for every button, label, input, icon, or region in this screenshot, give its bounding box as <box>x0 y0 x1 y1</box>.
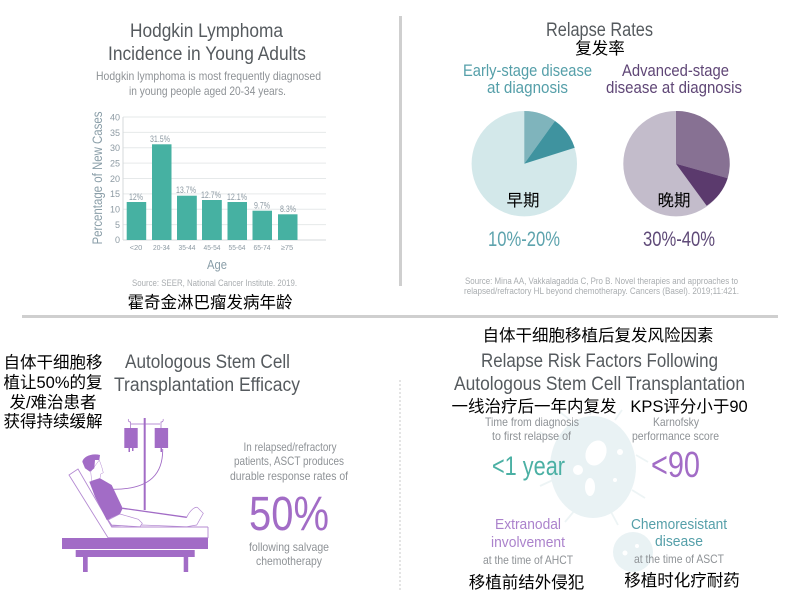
risk factor: extranodal involvement: Extranodal <box>495 516 561 533</box>
risk factor: Karnofsky score <box>630 397 748 485</box>
risk factor: extranodal involvement <box>469 516 584 592</box>
bar chart: percentage of new cases by age: 25 <box>110 158 120 168</box>
risk factor: time to relapse <box>452 397 616 481</box>
stat: 50 percent: 50% <box>249 488 329 541</box>
pie chart: early-stage relapse <box>472 111 577 216</box>
bar chart: percentage of new cases by age: 30 <box>110 143 120 153</box>
bar chart: percentage of new cases by age: 31.5% <box>150 134 170 144</box>
panel: relapse risk factors <box>452 326 748 592</box>
risk factor: chemoresistant disease <box>624 516 740 590</box>
icon: reclining mattress <box>69 469 208 538</box>
heading: relapse rates: 复发率 <box>575 39 625 58</box>
label: advanced-stage disease <box>606 61 742 97</box>
bar chart: percentage of new cases by age: 8.3% <box>280 204 296 214</box>
risk factor: chemoresistant disease: 移植时化疗耐药 <box>624 571 740 590</box>
bar chart: percentage of new cases by age: 35-44 <box>178 243 196 252</box>
bar chart: percentage of new cases by age: 65-74 <box>254 243 270 252</box>
label: early-stage disease: at diagnosis <box>487 78 568 97</box>
stat: advanced-stage rate: 30%-40% <box>643 228 715 251</box>
source: Mina et al <box>464 276 739 297</box>
bar chart: percentage of new cases by age: 15 <box>110 189 120 199</box>
text block: following salvage chemotherapy <box>249 540 329 568</box>
bar chart: percentage of new cases by age: 55-64 <box>228 243 246 252</box>
source: SEER: Source: SEER, National Cancer Institute. 2019. <box>132 278 297 289</box>
source: Mina et al: relapsed/refractory HL beyond chemotherapy. Cancers (Basel). 2019;11:421. <box>464 286 739 297</box>
bar chart: percentage of new cases by age: 10 <box>110 204 120 214</box>
heading: incidence in young adults: Hodgkin Lymphoma <box>130 21 283 42</box>
icon: large cell background <box>540 405 648 525</box>
text block: ASCT response <box>230 440 349 483</box>
label: early-stage disease <box>463 61 592 97</box>
risk factor: chemoresistant disease: Chemoresistant <box>631 516 728 533</box>
bar chart: percentage of new cases by age: 40 <box>110 112 120 122</box>
pie chart: early-stage relapse: 早期 <box>506 191 540 210</box>
heading: transplantation efficacy: Transplantation Efficacy <box>114 375 300 396</box>
text block: following salvage chemotherapy: following salvage <box>249 540 329 554</box>
bar chart: percentage of new cases by age: 20-34 <box>153 243 170 252</box>
risk factor: Karnofsky score: KPS评分小于90 <box>630 397 748 416</box>
text block: Chinese efficacy note: 发/难治患者 <box>9 393 97 412</box>
icon: small cell background <box>613 532 653 572</box>
risk factor: time to relapse: <1 year <box>492 451 565 481</box>
text block: incidence description: in young people aged 20-34 years. <box>129 84 286 98</box>
risk factor: time to relapse: 一线治疗后一年内复发 <box>452 397 616 416</box>
risk factor: extranodal involvement: involvement <box>491 534 566 551</box>
risk factor: time to relapse: to first relapse of <box>492 429 572 443</box>
bar chart: percentage of new cases by age: <20 <box>130 243 142 252</box>
text block: ASCT response: In relapsed/refractory <box>244 440 336 454</box>
caption: Chinese chart title: 霍奇金淋巴瘤发病年龄 <box>128 293 293 312</box>
risk factor: chemoresistant disease: at the time of ASCT <box>634 552 725 566</box>
heading: Chinese risk factors title: 自体干细胞移植后复发风险因素 <box>482 326 714 345</box>
panel: transplantation efficacy <box>3 352 349 572</box>
icon: patient <box>82 454 203 527</box>
bar chart: percentage of new cases by age: 0 <box>115 235 120 245</box>
bar chart: percentage of new cases by age: 45-54 <box>204 243 220 252</box>
risk factor: Karnofsky score: Karnofsky <box>653 415 699 429</box>
risk factor: extranodal involvement: at the time of AHCT <box>483 553 574 567</box>
bar chart: percentage of new cases by age: 20 <box>110 174 120 184</box>
heading: relapse rates: Relapse Rates <box>546 20 653 41</box>
text block: Chinese efficacy note: 植让50%的复 <box>3 373 103 392</box>
risk factor: Karnofsky score: performance score <box>632 429 719 443</box>
pie chart: advanced-stage relapse <box>623 111 730 216</box>
text block: incidence description: Hodgkin lymphoma is most frequently diagnosed <box>96 69 321 83</box>
risk factor: extranodal involvement: 移植前结外侵犯 <box>469 573 584 592</box>
bar chart: percentage of new cases by age: Age <box>207 257 227 272</box>
text block: incidence description <box>96 69 321 98</box>
bar chart: percentage of new cases by age: Percentage of New Cases <box>90 111 105 244</box>
source: Mina et al: Source: Mina AA, Vakkalagadda C, Pro B. Novel therapies and approaches to <box>465 276 738 287</box>
bar chart: percentage of new cases by age: 9.7% <box>254 200 270 210</box>
heading: risk factors: Relapse Risk Factors Following <box>481 351 718 372</box>
bar chart: percentage of new cases by age: 12.1% <box>227 192 247 202</box>
risk factor: time to relapse: Time from diagnosis <box>485 415 579 429</box>
bar chart: percentage of new cases by age: 12.7% <box>201 190 221 200</box>
text block: Chinese efficacy note: 获得持续缓解 <box>4 412 102 431</box>
bar chart: percentage of new cases by age: 5 <box>115 220 120 230</box>
heading: relapse rates <box>546 20 653 58</box>
heading: incidence in young adults: Incidence in Young Adults <box>108 44 306 65</box>
icon: IV pole and bags <box>113 418 168 510</box>
icon: bed frame <box>62 538 208 572</box>
text block: ASCT response: durable response rates of <box>230 469 349 483</box>
text block: following salvage chemotherapy: chemotherapy <box>256 554 322 568</box>
label: early-stage disease: Early-stage disease <box>463 61 592 80</box>
risk factor: Karnofsky score: <90 <box>651 444 700 485</box>
label: advanced-stage disease: Advanced-stage <box>622 61 729 80</box>
panel: relapse rates <box>463 20 742 297</box>
heading: risk factors: Autologous Stem Cell Transplantation <box>454 374 745 395</box>
heading: transplantation efficacy <box>114 352 300 396</box>
bar chart: percentage of new cases by age: 35 <box>110 128 120 138</box>
pie chart: advanced-stage relapse: 晚期 <box>658 191 690 210</box>
text block: ASCT response: patients, ASCT produces <box>234 454 344 468</box>
label: advanced-stage disease: disease at diagnosis <box>606 78 742 97</box>
stat: early-stage rate: 10%-20% <box>488 228 560 251</box>
panel: Hodgkin lymphoma incidence <box>90 21 326 312</box>
risk factor: chemoresistant disease: disease <box>655 533 703 550</box>
text block: Chinese efficacy note: 自体干细胞移 <box>4 353 102 372</box>
heading: risk factors <box>454 351 745 395</box>
bar chart: percentage of new cases by age: 12% <box>129 192 143 202</box>
illustration: patient receiving infusion in bed <box>62 418 208 572</box>
bar chart: percentage of new cases by age <box>90 111 326 272</box>
heading: transplantation efficacy: Autologous Stem Cell <box>125 352 290 373</box>
heading: incidence in young adults <box>108 21 306 65</box>
bar chart: percentage of new cases by age: ≥75 <box>281 243 293 252</box>
bar chart: percentage of new cases by age: 13.7% <box>176 185 196 195</box>
text block: Chinese efficacy note <box>3 353 103 431</box>
